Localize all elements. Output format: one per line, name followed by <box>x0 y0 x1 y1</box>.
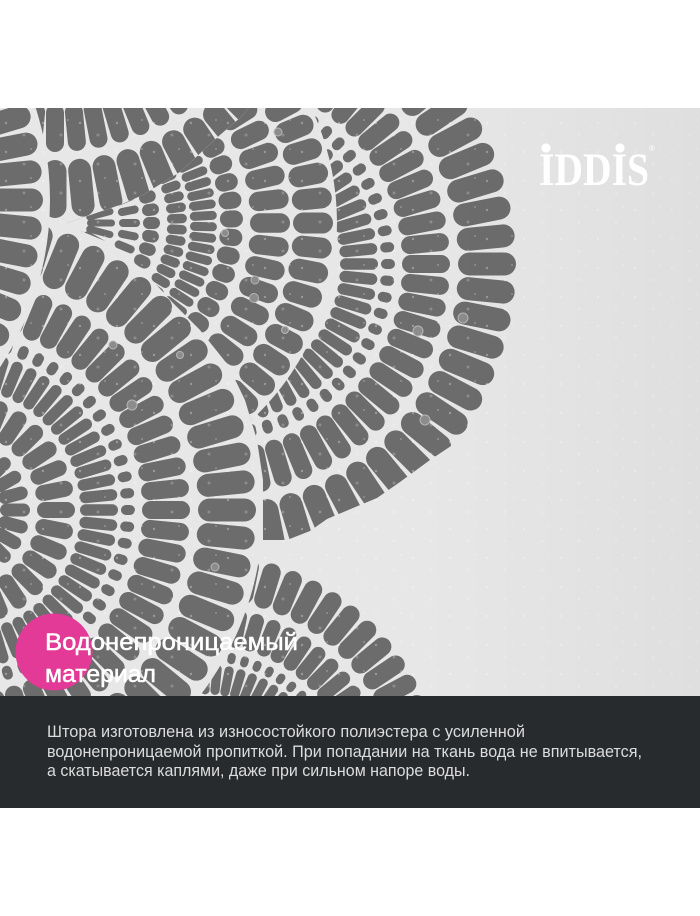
text block: description <box>47 723 642 780</box>
text block: description: водонепроницаемой пропиткой. При попадании на ткань вода не впитывается, <box>47 743 642 761</box>
pattern: left medallion <box>0 108 50 368</box>
text block: description: а скатывается каплями, даже при сильном напоре воды. <box>47 762 470 780</box>
text block: description: Штора изготовлена из износостойкого полиэстера с усиленной <box>47 723 525 741</box>
logo: IDDIS: IDDIS <box>539 144 649 196</box>
logo: IDDIS: ® <box>649 144 655 153</box>
pattern: top medallion <box>36 108 248 218</box>
heading <box>45 629 298 688</box>
large water drops <box>109 128 468 571</box>
panel: dark description bar <box>0 696 700 808</box>
water droplets texture <box>4 119 513 688</box>
pattern: main medallion <box>66 108 516 540</box>
icon: pink circle accent <box>16 614 92 690</box>
heading: материал <box>45 661 156 688</box>
heading: Водонепроницаемый <box>45 629 298 656</box>
pattern: lower-left medallion <box>0 227 258 696</box>
panel: shower curtain photo <box>0 108 700 696</box>
right side shading <box>0 108 700 696</box>
pattern: bottom medallion <box>202 564 420 696</box>
